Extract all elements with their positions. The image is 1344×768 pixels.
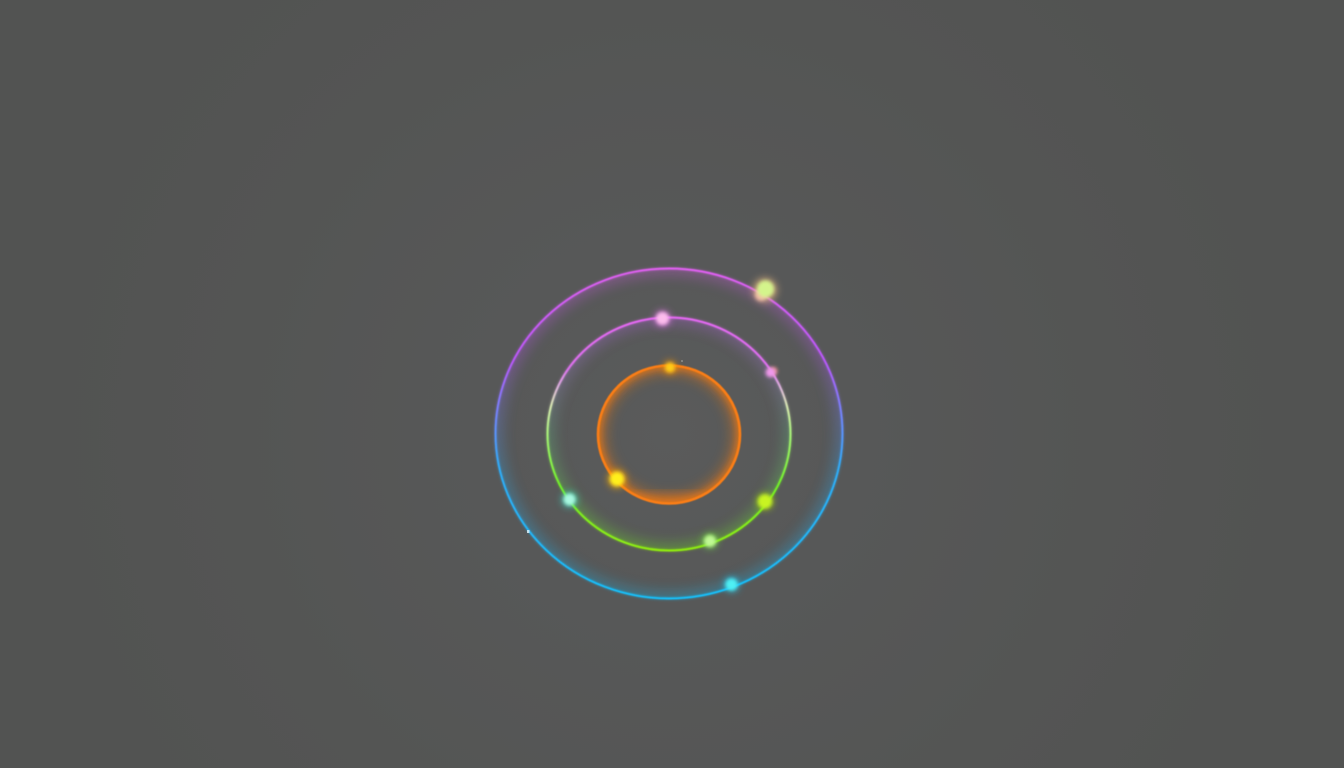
- middle ring: [547, 317, 791, 551]
- node: pink on middle ring top: [654, 310, 670, 326]
- node: large lime glow on outer ring: [753, 278, 777, 302]
- node: cyan on outer ring bottom: [724, 577, 739, 592]
- node: small pink on middle ring right: [766, 367, 778, 378]
- orbit diagram background and rings: [492, 265, 846, 602]
- inner orange ring: [598, 365, 740, 515]
- node: yellow on inner ring lower left: [608, 470, 626, 488]
- speck on outer ring: [527, 530, 530, 533]
- node: aqua on middle ring lower left: [562, 492, 578, 508]
- node: green on middle ring bottom: [702, 534, 718, 548]
- speck above inner ring: [681, 360, 683, 362]
- node: amber on inner ring top: [663, 360, 677, 374]
- outer ring: [495, 268, 843, 599]
- node: lime on middle ring lower right: [757, 494, 773, 510]
